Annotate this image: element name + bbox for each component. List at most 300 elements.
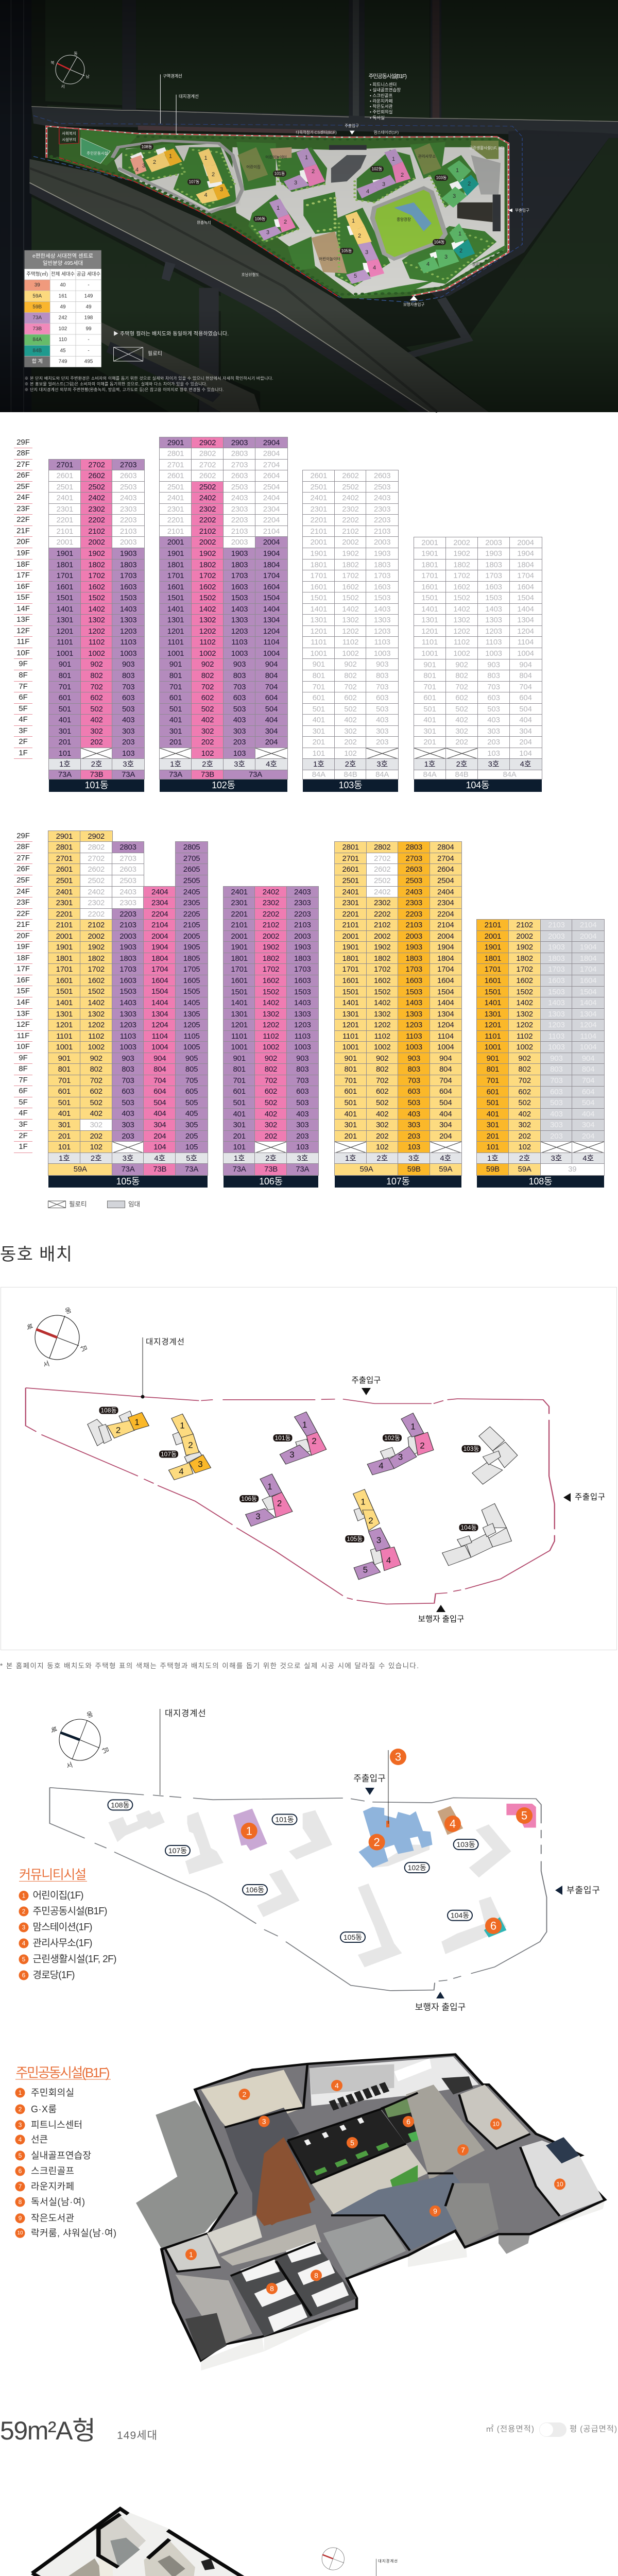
site shapes bbox=[49, 1788, 546, 1991]
unit table: building 101: 73A bbox=[58, 770, 72, 779]
building pills: 102동 bbox=[408, 1863, 426, 1872]
unit table: building 104: 402 bbox=[455, 716, 468, 724]
unit table: building 107: 4호 bbox=[440, 1154, 451, 1163]
facility badges: 1 bbox=[246, 1824, 252, 1837]
unit table: building 103: 103동 bbox=[339, 780, 362, 790]
site plan labels: 부출입구 bbox=[515, 207, 529, 212]
unit table: building 101: 2102 bbox=[88, 527, 105, 536]
unit table: building 101: 1602 bbox=[88, 583, 105, 591]
unit table: building 106: 1503 bbox=[294, 988, 311, 996]
unit table: building 101: 73A bbox=[122, 770, 135, 779]
unit table: building 104: 2004 bbox=[517, 538, 534, 547]
unit table: building 108: 902 bbox=[518, 1054, 531, 1063]
wing numbers: 1 bbox=[180, 1421, 185, 1430]
unit table: building 105: 1605 bbox=[183, 976, 200, 985]
unit table: building 102: 704 bbox=[265, 683, 278, 691]
legend: resident facilities: 락커룸, 샤워실(남·여) bbox=[31, 2228, 116, 2238]
wing numbers: 4 bbox=[379, 1461, 384, 1470]
unit table: building 105: 1304 bbox=[151, 1010, 168, 1019]
unit table: building 104: 1201 bbox=[421, 627, 438, 636]
unit table: building 108: 102 bbox=[518, 1143, 531, 1151]
unit table: building 105: 1303 bbox=[119, 1010, 136, 1019]
entrances: 보행자 출입구 bbox=[415, 2002, 466, 2012]
unit table: building 104: 603 bbox=[487, 693, 500, 702]
unit table: building 105: 704 bbox=[153, 1076, 166, 1085]
unit table: building 106: 1302 bbox=[263, 1010, 279, 1019]
unit table: building 108: 1501 bbox=[485, 988, 501, 996]
unit table: building 108: 1302 bbox=[516, 1010, 533, 1019]
unit table: building 102: 102동 bbox=[212, 780, 235, 790]
boundary leader: 대지경계선 bbox=[165, 1708, 206, 1718]
unit table: building 105: 4호 bbox=[154, 1154, 165, 1163]
unit table: building 108: 1701 bbox=[485, 965, 501, 974]
compass: 서 bbox=[65, 1761, 74, 1770]
unit table: building 106: 1901 bbox=[231, 943, 248, 952]
unit table: building 103: 2201 bbox=[311, 516, 327, 524]
unit table: building 105: 1502 bbox=[88, 987, 105, 996]
unit table: building 107: 702 bbox=[376, 1076, 388, 1085]
unit table: building 103: 3호 bbox=[376, 760, 388, 769]
unit table: building 102: 1202 bbox=[199, 627, 216, 636]
floor labels: upper table: 29F bbox=[16, 438, 30, 446]
unit table: building 107: 2102 bbox=[374, 921, 391, 929]
unit table: building 108: 1704 bbox=[580, 965, 596, 974]
unit table: building 106: 1602 bbox=[263, 976, 279, 985]
entrances: 주출입구 bbox=[575, 1492, 605, 1501]
badges on plan: 6 bbox=[406, 2117, 410, 2126]
unit table: building 102: 202 bbox=[201, 738, 214, 747]
unit table: building 106: 303 bbox=[296, 1121, 309, 1129]
building pills: hero: 103동 bbox=[436, 175, 447, 180]
unit table: building 103: 302 bbox=[344, 727, 357, 736]
unit table: building 104: 1903 bbox=[485, 549, 502, 558]
unit table: building 101: 702 bbox=[90, 683, 103, 691]
unit table: building 107: 1301 bbox=[342, 1010, 359, 1019]
building labels: 108동 bbox=[100, 1406, 117, 1414]
unit table: building 105: 2005 bbox=[183, 932, 200, 941]
unit table: building 102: 504 bbox=[265, 705, 278, 714]
unit table: building 101: 2202 bbox=[88, 516, 105, 524]
floor labels: upper table: 27F bbox=[16, 460, 30, 469]
unit table: building 107: 302 bbox=[376, 1121, 388, 1129]
section header: 59A bbox=[0, 2416, 617, 2445]
unit table: building 102: 203 bbox=[233, 738, 246, 747]
unit table: building 104: 503 bbox=[487, 705, 500, 714]
floor labels: lower table: 4F bbox=[19, 1109, 28, 1117]
unit table: building 104: 104동 bbox=[466, 780, 489, 790]
isometric floor plan: resident facilities bbox=[136, 2055, 605, 2370]
unit table: building 108: 1402 bbox=[516, 998, 533, 1007]
floor labels: upper table: 25F bbox=[16, 482, 30, 491]
unit table: building 104: 502 bbox=[455, 705, 468, 714]
floor labels: lower table: 25F bbox=[16, 876, 30, 885]
unit table: building 102: 1403 bbox=[231, 605, 248, 614]
unit table: building 105: 2105 bbox=[183, 921, 200, 929]
unit table: building 102: 2001 bbox=[167, 538, 184, 547]
unit table: building 103: 101 bbox=[313, 749, 325, 758]
unit table: building 103: 1303 bbox=[374, 616, 390, 624]
unit table: building 106: 1903 bbox=[294, 943, 311, 952]
unit table: building 105: 1004 bbox=[151, 1043, 168, 1052]
table: unit type counts: 40 bbox=[60, 282, 66, 288]
unit table: building 108: 803 bbox=[550, 1065, 563, 1074]
unit table: building 105: 2601 bbox=[56, 865, 73, 874]
unit table: building 102: 1호 bbox=[170, 760, 181, 769]
unit table: building 103: 1501 bbox=[311, 594, 327, 602]
unit table: building 103: 201 bbox=[313, 738, 325, 747]
unit table: building 107: 1402 bbox=[374, 998, 391, 1007]
unit table: building 105: 602 bbox=[90, 1087, 102, 1096]
unit table: building 108: 1004 bbox=[580, 1043, 596, 1052]
legend: resident facilities: 4 bbox=[19, 2136, 22, 2143]
unit table: building 108: 1604 bbox=[580, 976, 596, 985]
unit table: building 106: 2403 bbox=[294, 888, 311, 896]
building pills: hero: 2 bbox=[212, 172, 215, 178]
unit table: building 103: 2502 bbox=[342, 483, 359, 492]
unit table: building 105: 403 bbox=[122, 1109, 134, 1118]
unit table: building 106: 1203 bbox=[294, 1021, 311, 1029]
unit table: building 104: 1203 bbox=[485, 627, 502, 636]
unit table: building 104: 703 bbox=[487, 683, 500, 691]
unit table: building 107: 1904 bbox=[437, 943, 454, 952]
table: unit type counts: 59A bbox=[32, 293, 42, 299]
unit table: building 101: 3호 bbox=[123, 760, 134, 769]
unit table: building 107: 1202 bbox=[374, 1021, 391, 1029]
unit table: building 103: 1201 bbox=[311, 627, 327, 636]
table: unit type counts bbox=[24, 250, 101, 367]
unit table: building 105: 2605 bbox=[183, 865, 200, 874]
wing numbers: 2 bbox=[116, 1425, 121, 1435]
unit table: building 103: 503 bbox=[376, 705, 388, 714]
unit table: building 107: 103 bbox=[408, 1143, 420, 1151]
unit table: building 108: 2104 bbox=[580, 921, 596, 929]
unit table: building 105: 2701 bbox=[56, 854, 73, 863]
unit table: building 106: 2101 bbox=[231, 921, 248, 929]
unit table: building 108: 101 bbox=[487, 1143, 499, 1151]
unit table: building 102: 401 bbox=[169, 716, 182, 724]
unit table: building 104: 602 bbox=[455, 693, 468, 702]
unit table: building 106: 2301 bbox=[231, 899, 248, 907]
unit table: building 104: 501 bbox=[423, 705, 436, 714]
unit table: building 105: 2602 bbox=[88, 865, 105, 874]
wing numbers: 1 bbox=[360, 1497, 366, 1506]
unit table: building 106: 2401 bbox=[231, 888, 248, 896]
unit table: building 105: 503 bbox=[122, 1098, 134, 1107]
unit table: building 102: 1503 bbox=[231, 594, 248, 602]
unit table: building 101: 601 bbox=[59, 693, 71, 702]
table: unit type counts: e편한세상 서대전역 센트로 bbox=[32, 252, 93, 259]
unit table: building 101: 2401 bbox=[57, 494, 73, 502]
unit table: building 107: 902 bbox=[376, 1054, 388, 1063]
unit table: building 108: 1104 bbox=[580, 1032, 596, 1041]
unit table: building 102: 601 bbox=[169, 693, 182, 702]
unit table: building 101: 1402 bbox=[88, 605, 105, 614]
floor labels: upper table: 22F bbox=[16, 515, 30, 524]
unit table: building 105: 2201 bbox=[56, 910, 73, 919]
unit table: building 102: 1801 bbox=[167, 561, 184, 569]
unit table: building 107: 2501 bbox=[342, 876, 359, 885]
unit table: building 106: 502 bbox=[265, 1098, 277, 1107]
site boundary bbox=[26, 1388, 555, 1604]
building pills bbox=[108, 1800, 478, 1942]
unit table: building 108: 1201 bbox=[485, 1021, 501, 1029]
unit table: building 101: 103 bbox=[122, 749, 134, 758]
unit table: building 102: 2401 bbox=[167, 494, 184, 502]
unit table: building 108: 403 bbox=[550, 1110, 563, 1118]
site plan labels: 주출입구 bbox=[345, 123, 359, 128]
unit table: building 103: 601 bbox=[313, 693, 325, 702]
unit table: building 101: 2003 bbox=[120, 538, 136, 547]
unit table: building 101: 1803 bbox=[120, 561, 136, 569]
building pills: hero: 2 bbox=[358, 233, 361, 239]
unit table: building 105: 1803 bbox=[119, 954, 136, 963]
unit table: building 105: 2603 bbox=[119, 865, 136, 874]
unit table: building 106: 2402 bbox=[263, 888, 279, 896]
unit table: building 107: 2104 bbox=[437, 921, 454, 929]
unit table: building 107: 203 bbox=[408, 1132, 420, 1141]
aerial base of roads and site bbox=[0, 0, 618, 412]
unit table: building 106: 3호 bbox=[297, 1154, 308, 1163]
table: unit type counts: 495 bbox=[84, 359, 93, 365]
compass: 남 bbox=[79, 1344, 89, 1352]
unit table: building 107: 107동 bbox=[386, 1176, 410, 1187]
unit table: building 105: 1903 bbox=[119, 943, 136, 952]
unit table: building 108: 1401 bbox=[485, 998, 501, 1007]
unit table: building 105: 1001 bbox=[56, 1043, 73, 1052]
unit table: building 101: 2502 bbox=[88, 483, 105, 492]
hero footnotes: ※ 본 홍보물 일러스트(그림)은 소비자의 이해를 돕기위한 것으로, 실제와 다소 차이가 있을 수 있습니다. bbox=[24, 381, 207, 386]
unit table: building 105: 1405 bbox=[183, 998, 200, 1007]
unit table: building 101: 2201 bbox=[57, 516, 73, 524]
unit table: building 101: 602 bbox=[90, 693, 103, 702]
unit table: building 108: 1802 bbox=[516, 954, 533, 963]
unit table: building 105: 2305 bbox=[183, 899, 200, 907]
unit table: building 103: 803 bbox=[376, 671, 388, 680]
unit table: building 107: 803 bbox=[408, 1065, 420, 1074]
floor labels: lower table: 13F bbox=[16, 1009, 30, 1018]
unit table: building 107: 2001 bbox=[342, 932, 359, 941]
unit table: building 105: 2703 bbox=[119, 854, 136, 863]
badges on plan: 7 bbox=[461, 2146, 465, 2154]
floor labels: upper table: 21F bbox=[16, 527, 30, 535]
unit table: building 102: 702 bbox=[201, 683, 214, 691]
unit table: building 102: 2903 bbox=[231, 438, 248, 447]
unit table: building 107: 402 bbox=[376, 1110, 388, 1118]
floor labels: upper table: 10F bbox=[16, 649, 30, 657]
unit table: building 107: 59A bbox=[359, 1165, 373, 1174]
table: unit type counts: 주택형(㎡) bbox=[26, 272, 48, 277]
legend: community facilities: 경로당(1F) bbox=[33, 1969, 75, 1980]
badges on plan: 1 bbox=[189, 2250, 193, 2259]
unit table: building 107: 1401 bbox=[342, 998, 359, 1007]
unit table: building 104: 1602 bbox=[453, 583, 470, 591]
unit table: building 104: 1704 bbox=[517, 571, 534, 580]
building pills: hero: 2 bbox=[312, 168, 315, 175]
unit table: building 106: 2303 bbox=[294, 899, 311, 907]
building pills: hero: 104동 bbox=[434, 240, 444, 244]
unit table: building 101: 2603 bbox=[120, 471, 136, 480]
legend: resident facilities: 주민공동시설(B1F) bbox=[16, 2065, 110, 2080]
unit table: building 105: 504 bbox=[153, 1098, 166, 1107]
unit table: building 105: 73A bbox=[185, 1165, 198, 1174]
unit table: building 105: 2803 bbox=[119, 843, 136, 852]
color note and piloti legend: 필로티 bbox=[148, 350, 162, 357]
unit table: building 102: 304 bbox=[265, 727, 278, 736]
unit table: building 106: 2103 bbox=[294, 921, 311, 929]
unit table: building 106: 1802 bbox=[263, 954, 279, 963]
unit table: building 102: 501 bbox=[169, 705, 182, 714]
compass: 동 bbox=[64, 1306, 72, 1315]
unit table: building 105: 2002 bbox=[88, 932, 105, 941]
unit table: building 102: 1404 bbox=[263, 605, 280, 614]
unit table: building 108 bbox=[476, 919, 605, 1188]
legend: resident facilities: 2 bbox=[19, 2106, 22, 2113]
unit table: building 108: 801 bbox=[487, 1065, 499, 1074]
key map: 59A: 대지경계선 bbox=[378, 2558, 398, 2564]
unit table: building 106: 1502 bbox=[263, 988, 279, 996]
unit table: building 101: 1401 bbox=[57, 605, 73, 614]
unit table: building 101: 1802 bbox=[88, 561, 105, 569]
unit table: building 103: 102 bbox=[344, 749, 357, 758]
unit table: building 101: 1202 bbox=[88, 627, 105, 636]
building pills: hero: 4 bbox=[366, 189, 369, 195]
community facility list: hero: 주민공동시설(B1F) bbox=[369, 73, 407, 79]
unit table: building 102: 2501 bbox=[167, 483, 184, 492]
unit table: building 107: 102 bbox=[376, 1143, 388, 1151]
unit table: building 107: 1601 bbox=[342, 976, 359, 985]
unit table: building 106: 901 bbox=[233, 1054, 246, 1063]
unit table: building 105: 1002 bbox=[88, 1043, 105, 1052]
community facility list: hero: • 피트니스센터 bbox=[370, 82, 397, 87]
site plan labels: 근린생활시설(1F, 2F) bbox=[469, 145, 504, 150]
unit table: building 107: 703 bbox=[408, 1076, 420, 1085]
unit table: building 104: 1202 bbox=[453, 627, 470, 636]
unit table: building 108: 1904 bbox=[580, 943, 596, 952]
unit table: building 101: 2103 bbox=[120, 527, 136, 536]
unit table: building 104: 204 bbox=[519, 738, 532, 747]
unit table: building 101: 2503 bbox=[120, 483, 136, 492]
unit table: building 106 bbox=[223, 886, 319, 1188]
building labels: 102동 bbox=[384, 1434, 400, 1442]
unit table: building 105: 1005 bbox=[183, 1043, 200, 1052]
unit table: building 108: 108동 bbox=[529, 1176, 552, 1187]
unit table: building 107: 2402 bbox=[374, 888, 391, 896]
unit table: building 105: 401 bbox=[58, 1109, 71, 1118]
legend: resident facilities: 선큰 bbox=[31, 2134, 48, 2145]
unit table: building 104: 401 bbox=[423, 716, 436, 724]
unit table: building 104: 1601 bbox=[421, 583, 438, 591]
unit table: building 101: 603 bbox=[122, 693, 134, 702]
compass: hero: 동 bbox=[74, 52, 78, 56]
unit table: building 107: 704 bbox=[439, 1076, 452, 1085]
unit table: building 104: 1904 bbox=[517, 549, 534, 558]
unit table: building 107: 1호 bbox=[345, 1154, 356, 1163]
unit table: building 107: 802 bbox=[376, 1065, 388, 1074]
legend: resident facilities: 6 bbox=[19, 2167, 22, 2175]
unit table: building 105: 2004 bbox=[151, 932, 168, 941]
section header: 59A: ㎡ (전용면적) bbox=[486, 2425, 534, 2434]
unit table: building 108: 2004 bbox=[580, 932, 596, 941]
unit table: building 102: 1302 bbox=[199, 616, 216, 624]
building pills: 108동 bbox=[111, 1801, 130, 1809]
unit table: building 105: 804 bbox=[153, 1065, 166, 1074]
legend: community facilities: 6 bbox=[22, 1972, 26, 1979]
unit table: building 108: 59A bbox=[518, 1165, 531, 1174]
legend: community facilities: 근린생활시설(1F, 2F) bbox=[33, 1954, 116, 1965]
unit table: building 102: 901 bbox=[169, 660, 182, 669]
unit table: building 107: 2401 bbox=[342, 888, 359, 896]
unit table: building 103: 901 bbox=[313, 660, 325, 669]
floor labels: upper table: 17F bbox=[16, 571, 30, 580]
unit table: building 105: 1701 bbox=[56, 965, 73, 974]
unit table: building 107: 904 bbox=[439, 1054, 452, 1063]
unit table: building 101: 1301 bbox=[57, 616, 73, 624]
unit table: building 107: 1504 bbox=[437, 987, 454, 996]
unit table: building 103 bbox=[302, 470, 399, 792]
unit table: building 105: 105 bbox=[185, 1143, 198, 1151]
unit table: building 108: 1102 bbox=[517, 1032, 533, 1041]
legend: resident facilities: G·X룸 bbox=[31, 2104, 57, 2114]
unit table: building 102: 1703 bbox=[231, 571, 248, 580]
unit table: building 108: 504 bbox=[582, 1098, 594, 1107]
unit table: building 107: 2403 bbox=[405, 888, 422, 896]
unit table: building 105: 1901 bbox=[56, 943, 73, 952]
unit table: building 103: 1701 bbox=[311, 571, 327, 580]
unit table: building 107: 1302 bbox=[374, 1010, 391, 1019]
site plan labels: 중앙광장 bbox=[397, 216, 411, 222]
unit table: building 104: 1804 bbox=[517, 561, 534, 569]
legend: resident facilities: 9 bbox=[19, 2215, 22, 2222]
unit table: building 102: 201 bbox=[169, 738, 182, 747]
unit table: building 102: 303 bbox=[233, 727, 246, 736]
leader to facility 3 bbox=[388, 1750, 389, 1824]
unit table: building 108: 1403 bbox=[548, 998, 565, 1007]
unit table: building 103: 303 bbox=[376, 727, 388, 736]
unit table: building 107: 1203 bbox=[405, 1021, 422, 1029]
unit table: building 101: 902 bbox=[90, 660, 103, 669]
floor labels: upper table: 5F bbox=[19, 704, 28, 713]
unit table: building 108: 304 bbox=[582, 1121, 594, 1129]
unit table: building 105: 2801 bbox=[56, 843, 73, 852]
badges on plan: 9 bbox=[433, 2207, 437, 2215]
unit table: building 105: 2502 bbox=[88, 876, 105, 885]
building pills: hero: 1 bbox=[456, 167, 459, 174]
unit table: building 101: 73B bbox=[90, 770, 104, 779]
color note and piloti legend: ▶ 주택형 컬러는 배치도와 동일하게 적용하였습니다. bbox=[113, 330, 229, 337]
unit table: building 104: 301 bbox=[423, 727, 436, 736]
building pills: hero: 4 bbox=[426, 261, 430, 267]
unit table: building 103: 1802 bbox=[342, 561, 359, 569]
community facility list: hero: • 실내골프연습장 bbox=[370, 88, 401, 93]
unit table: building 107: 2704 bbox=[437, 854, 454, 863]
table: unit type counts: 합 계 bbox=[32, 359, 43, 365]
floor labels: upper table: 14F bbox=[16, 604, 30, 613]
unit table: building 102: 2603 bbox=[231, 471, 248, 480]
floor labels: lower table: 22F bbox=[16, 909, 30, 918]
legend: resident facilities: 1 bbox=[19, 2089, 22, 2096]
community facility list: hero: • 스크린골프 bbox=[370, 93, 393, 98]
unit table: building 106: 701 bbox=[233, 1076, 246, 1085]
color note and piloti legend bbox=[113, 330, 229, 361]
floor labels: lower table: 3F bbox=[19, 1120, 28, 1129]
building labels: 104동 bbox=[460, 1524, 477, 1531]
unit table: building 102: 2004 bbox=[263, 538, 280, 547]
table: unit type counts: 110 bbox=[59, 337, 67, 343]
unit table: building 108: 1504 bbox=[580, 988, 596, 996]
floor labels: lower table: 9F bbox=[19, 1054, 28, 1062]
compass: hero: 서 bbox=[61, 84, 65, 89]
unit table: building 104: 1102 bbox=[454, 638, 470, 647]
